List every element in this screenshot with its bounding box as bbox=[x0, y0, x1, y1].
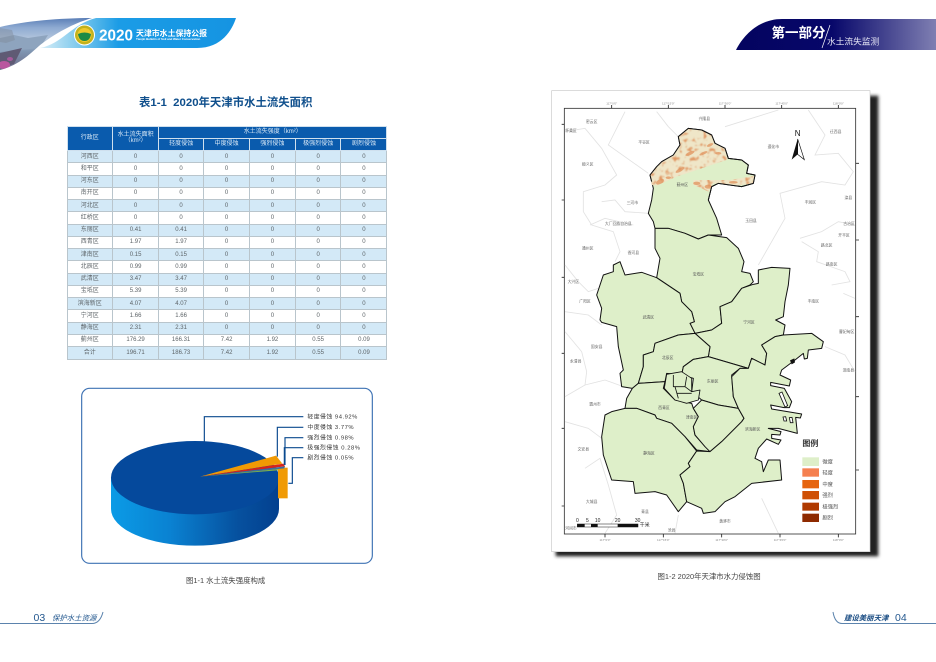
table: soil erosion area by district: 0 bbox=[225, 154, 228, 160]
table: soil erosion area by district: 0 bbox=[362, 264, 366, 270]
neighbouring place names: 古冶区 bbox=[843, 221, 855, 226]
table: soil erosion area by district: 0.99 bbox=[175, 264, 187, 270]
coordinate ticks bbox=[562, 105, 859, 537]
table: soil erosion area by district: 行政区 bbox=[81, 135, 99, 141]
table: soil erosion area by district: 196.71 bbox=[126, 350, 145, 356]
footer right: slogan and page number: 04 bbox=[895, 612, 907, 624]
table: soil erosion area by district: 蓟州区 bbox=[81, 337, 99, 343]
table: soil erosion area by district: 0.15 bbox=[130, 252, 141, 258]
region: Jinghai bbox=[602, 408, 697, 512]
Tianjin district names: 宝坻区 bbox=[693, 271, 704, 276]
scale bar: 20 bbox=[615, 518, 621, 524]
neighbouring place names: 丰南区 bbox=[808, 298, 819, 303]
neighbouring place names: 广阳区 bbox=[579, 298, 591, 303]
pie legend labels: 强烈侵蚀 0.98% bbox=[307, 433, 354, 441]
leader lines bbox=[204, 417, 303, 483]
table: soil erosion area by district: 0 bbox=[225, 325, 228, 331]
neighbouring place names: 大城县 bbox=[586, 499, 598, 504]
table: soil erosion area by district: 0.41 bbox=[175, 227, 187, 233]
wedge: extreme erosion bbox=[200, 466, 285, 477]
table: soil erosion area by district: 0 bbox=[134, 190, 137, 196]
table: soil erosion area by district: 0 bbox=[225, 215, 228, 221]
map drop shadow bbox=[556, 96, 878, 556]
table: soil erosion area by district: 2.31 bbox=[130, 325, 141, 331]
table: soil erosion area by district: 1.66 bbox=[130, 313, 141, 319]
table: soil erosion area by district: 0 bbox=[362, 178, 366, 184]
part subtitle: 水土流失监测 bbox=[827, 36, 879, 46]
Tianjin district names: 蓟州区 bbox=[677, 182, 688, 187]
table: soil erosion area by district: 0 bbox=[362, 301, 366, 307]
icon: north arrow: N bbox=[795, 129, 801, 138]
table: soil erosion area by district: 0.15 bbox=[175, 252, 187, 258]
table: soil erosion area by district: 0 bbox=[362, 276, 366, 282]
table: soil erosion area by district: 0 bbox=[179, 166, 183, 172]
region: Jizhou bbox=[648, 128, 755, 239]
coordinate labels: 117°45′0″ bbox=[775, 101, 788, 105]
table: soil erosion area by district: 0 bbox=[271, 178, 274, 184]
coordinate labels: 117°30′0″ bbox=[715, 538, 728, 542]
map legend: 极强烈 bbox=[822, 503, 839, 511]
table: soil erosion area by district: 1.92 bbox=[267, 350, 278, 356]
table: soil erosion area by district: 3.47 bbox=[175, 276, 187, 282]
neighbouring place names: 黄骅市 bbox=[719, 518, 731, 523]
neighbouring place names: 滦县 bbox=[845, 195, 852, 200]
table: soil erosion area by district: 0 bbox=[134, 178, 137, 184]
caption: figure 1-1: 图1-1 水土流失强度构成 bbox=[186, 576, 265, 585]
table: soil erosion area by district: 0 bbox=[179, 203, 183, 209]
map legend: 中度 bbox=[822, 480, 834, 488]
scale bar bbox=[576, 518, 650, 529]
neighbouring place names: 路北区 bbox=[821, 242, 833, 247]
Tianjin district names: 武清区 bbox=[643, 315, 654, 320]
exploded orange side bbox=[278, 468, 288, 498]
table: soil erosion area by district: 0 bbox=[362, 325, 366, 331]
table: soil erosion area by district: 和平区 bbox=[81, 166, 99, 172]
table: soil erosion area by district: 0 bbox=[316, 154, 320, 160]
footer left: page number and section: 03 bbox=[34, 612, 45, 624]
neighbouring place names: 玉田县 bbox=[745, 218, 757, 223]
map legend: 轻度 bbox=[822, 469, 834, 477]
table: soil erosion area by district: 西青区 bbox=[81, 239, 99, 245]
footer right: slogan and page number bbox=[832, 612, 936, 624]
coordinate labels: 117°45′0″ bbox=[774, 538, 786, 542]
table: soil erosion area by district: 0 bbox=[362, 313, 366, 319]
table: soil erosion area by district: 0 bbox=[225, 264, 228, 270]
table: soil erosion area by district: 0 bbox=[316, 313, 320, 319]
table: soil erosion area by district: 5.39 bbox=[175, 288, 187, 294]
table: soil erosion area by district: 0 bbox=[179, 154, 183, 160]
Tianjin district names: 静海区 bbox=[643, 451, 655, 456]
table: soil erosion area by district: 强烈侵蚀 bbox=[260, 141, 284, 147]
table: soil erosion area by district: 0 bbox=[271, 227, 274, 233]
header banner: part one bbox=[736, 19, 936, 50]
bulletin english name: Tianjin Bulletin of Soil and Water Conservation bbox=[136, 37, 200, 41]
table: soil erosion area by district: 水土流失强度（km²） bbox=[244, 129, 302, 135]
table: soil erosion area by district: 0 bbox=[316, 288, 320, 294]
table: soil erosion area by district: 宝坻区 bbox=[81, 288, 99, 294]
table: soil erosion area by district: 剧烈侵蚀 bbox=[352, 141, 376, 147]
region: Binhai bbox=[680, 333, 823, 513]
table: soil erosion area by district: 0 bbox=[316, 325, 320, 331]
header banner: bulletin logo strip bbox=[0, 18, 236, 70]
table: soil erosion area by district: 0 bbox=[271, 190, 274, 196]
neighbouring place names bbox=[565, 116, 855, 532]
table: soil erosion area by district: 轻度侵蚀 bbox=[169, 141, 193, 147]
table: soil erosion area by district: 0 bbox=[179, 215, 183, 221]
coordinate labels: 117°15′0″ bbox=[662, 101, 675, 105]
map sheet bbox=[552, 91, 870, 552]
table: soil erosion area by district: 0 bbox=[271, 166, 274, 172]
bulletin name: 天津市水土保持公报 bbox=[136, 28, 207, 38]
region: central urban districts bbox=[664, 372, 700, 403]
table: soil erosion area by district: 0 bbox=[271, 301, 274, 307]
pie side bbox=[111, 478, 279, 546]
photo swoosh bbox=[0, 18, 92, 70]
map legend bbox=[802, 438, 839, 522]
table: soil erosion area by district: 水土流失面积 bbox=[118, 132, 154, 138]
neighbouring place names: 通州区 bbox=[582, 246, 594, 251]
coordinate labels bbox=[600, 101, 844, 542]
table: soil erosion area by district: 宁河区 bbox=[81, 313, 99, 319]
table: soil erosion area by district: 1.66 bbox=[175, 313, 187, 319]
table: soil erosion area by district: 0 bbox=[271, 276, 274, 282]
region: Beichen bbox=[638, 333, 710, 383]
neighbouring place names: 迁西县 bbox=[830, 129, 842, 134]
region: Ninghe bbox=[695, 267, 790, 368]
Tianjin district names: 津南区 bbox=[686, 414, 698, 419]
2020: 2020 bbox=[99, 28, 133, 44]
table: soil erosion area by district: 0.55 bbox=[312, 337, 324, 343]
region: Xiqing bbox=[625, 382, 710, 452]
footer left: page number and section bbox=[0, 612, 104, 624]
table: soil erosion area by district: 0 bbox=[271, 239, 274, 245]
pie top: light erosion bbox=[111, 441, 279, 514]
table: soil erosion area by district: 0 bbox=[271, 313, 274, 319]
map legend: 强烈 bbox=[822, 491, 834, 499]
coordinate labels: 117°30′0″ bbox=[719, 101, 731, 105]
icon: north arrow bbox=[792, 129, 804, 160]
table: soil erosion area by district: 0 bbox=[316, 276, 320, 282]
scale bar: 10 bbox=[595, 518, 601, 524]
table: soil erosion area by district: 0.99 bbox=[130, 264, 141, 270]
table: soil erosion area by district: 0 bbox=[362, 215, 366, 221]
coordinate labels: 117°15′0″ bbox=[657, 538, 670, 542]
region: Dongli bbox=[682, 357, 748, 408]
table: soil erosion area by district: 166.31 bbox=[172, 337, 190, 343]
map legend: 图例 bbox=[802, 438, 818, 448]
table: soil erosion area by district: 0 bbox=[179, 178, 183, 184]
pie legend labels: 极强烈侵蚀 0.28% bbox=[307, 443, 360, 451]
table: soil erosion area by district: 5.39 bbox=[130, 288, 141, 294]
neighbouring place names: 怀柔区 bbox=[565, 128, 577, 133]
table: soil erosion area by district: 北辰区 bbox=[81, 264, 99, 270]
Tianjin district names: 宁河区 bbox=[743, 320, 755, 325]
table: soil erosion area by district: 4.07 bbox=[175, 301, 187, 307]
table: soil erosion area by district: 0 bbox=[225, 239, 228, 245]
table: soil erosion area by district: 176.29 bbox=[126, 337, 145, 343]
table: soil erosion area by district: 0 bbox=[362, 288, 366, 294]
neighbouring place names: 路南区 bbox=[826, 261, 838, 266]
scale bar: 千米 bbox=[640, 522, 650, 529]
table: soil erosion area by district: 0.09 bbox=[358, 337, 370, 343]
coordinate labels: 118°0′0″ bbox=[833, 538, 844, 542]
part title: 第一部分 bbox=[772, 24, 826, 40]
table: soil erosion area by district: 0 bbox=[225, 227, 228, 233]
table: soil erosion area by district: 1.97 bbox=[130, 239, 141, 245]
neighbouring place names: 永清县 bbox=[570, 358, 582, 363]
region polygons bbox=[597, 128, 823, 513]
table: soil erosion area by district: 0 bbox=[225, 276, 228, 282]
neighbouring place names: 曹妃甸区 bbox=[839, 329, 854, 334]
table: soil erosion area by district: 186.73 bbox=[172, 350, 190, 356]
table: soil erosion area by district: 0 bbox=[271, 288, 274, 294]
table: soil erosion area by district: 0 bbox=[362, 239, 366, 245]
table: soil erosion area by district: 0 bbox=[316, 190, 320, 196]
pie legend labels: 中度侵蚀 3.77% bbox=[307, 423, 354, 431]
caption: figure 1-2: 图1-2 2020年天津市水力侵蚀图 bbox=[658, 572, 761, 581]
scale bar: 0 bbox=[576, 518, 579, 524]
table: soil erosion area by district: 0 bbox=[225, 288, 228, 294]
table: soil erosion area by district: 0.09 bbox=[358, 350, 370, 356]
neighbouring place names: 遵化市 bbox=[768, 144, 779, 149]
table: soil erosion area by district: 2.31 bbox=[175, 325, 187, 331]
Tianjin district names: 西青区 bbox=[658, 405, 670, 410]
table: soil erosion area by district: （km²） bbox=[125, 138, 147, 144]
table: soil erosion area by district: 0 bbox=[316, 264, 320, 270]
erosion patches in north Jizhou bbox=[650, 129, 754, 192]
table: soil erosion area by district: 0 bbox=[316, 301, 320, 307]
neighbouring place names: 兴隆县 bbox=[699, 116, 710, 121]
table: soil erosion area by district: 津南区 bbox=[81, 252, 99, 258]
table: soil erosion area by district: 0 bbox=[362, 203, 366, 209]
scale bar: 5 bbox=[586, 518, 589, 524]
table: soil erosion area by district: 0 bbox=[134, 166, 137, 172]
panel: erosion map of Tianjin bbox=[551, 90, 881, 559]
table: soil erosion area by district: 0 bbox=[362, 252, 366, 258]
table: soil erosion area by district: 0 bbox=[362, 190, 366, 196]
Tianjin district names bbox=[643, 182, 760, 456]
wedge: severe erosion bbox=[200, 469, 278, 477]
neighbouring place names: 滦南县 bbox=[843, 367, 854, 372]
table: soil erosion area by district: 河东区 bbox=[81, 178, 99, 184]
map legend: 微度 bbox=[822, 457, 834, 465]
table: soil erosion area by district: 0 bbox=[134, 215, 137, 221]
pie legend labels bbox=[307, 413, 360, 462]
map frame bbox=[564, 108, 856, 534]
scale bar: 30 bbox=[635, 518, 641, 524]
neighbouring place names: 三河市 bbox=[627, 200, 638, 205]
table: soil erosion area by district: 0 bbox=[271, 325, 274, 331]
neighbouring place names: 固安县 bbox=[591, 344, 603, 349]
table: soil erosion area by district: 河北区 bbox=[81, 203, 99, 209]
table: soil erosion area by district: 0 bbox=[225, 301, 228, 307]
table: soil erosion area by district: 0 bbox=[316, 252, 320, 258]
Tianjin district names: 滨海新区 bbox=[745, 426, 760, 431]
table: soil erosion area by district: 0 bbox=[271, 264, 274, 270]
table: soil erosion area by district: 4.07 bbox=[130, 301, 141, 307]
table: soil erosion area by district: 河西区 bbox=[81, 154, 99, 160]
wedge: moderate erosion bbox=[200, 456, 282, 477]
region: Baodi bbox=[655, 228, 753, 333]
table: soil erosion area by district bbox=[67, 126, 387, 360]
harbour inlets bbox=[779, 392, 793, 423]
table: soil erosion area by district: 0 bbox=[271, 252, 274, 258]
Tianjin district names: 东丽区 bbox=[707, 378, 719, 383]
neighbouring place names: 大兴区 bbox=[568, 279, 579, 284]
table: soil erosion area by district: 0 bbox=[316, 239, 320, 245]
footer right: slogan and page number: 建设美丽天津 bbox=[844, 614, 890, 622]
neighbouring place names: 沧县 bbox=[668, 527, 676, 532]
blue ribbon bbox=[40, 18, 236, 48]
table: soil erosion area by district: 0.41 bbox=[130, 227, 141, 233]
neighbouring place names: 顺义区 bbox=[582, 162, 594, 167]
Tianjin district names: 北辰区 bbox=[662, 355, 674, 360]
footer left: page number and section: 保护水土资源 bbox=[52, 614, 98, 622]
table: soil erosion area by district: 3.47 bbox=[130, 276, 141, 282]
region: Jinnan bbox=[693, 400, 744, 452]
neighbouring place names: 开平区 bbox=[838, 233, 850, 237]
neighbouring place names: 密云区 bbox=[586, 119, 598, 124]
table: soil erosion area by district: 0 bbox=[225, 166, 228, 172]
coordinate labels: 117°0′0″ bbox=[606, 101, 617, 105]
table: soil erosion area by district: 滨海新区 bbox=[78, 301, 102, 307]
panel: 3D pie chart of erosion intensity bbox=[81, 388, 373, 564]
neighbouring boundaries bbox=[565, 110, 855, 533]
table: soil erosion area by district: 0 bbox=[362, 154, 366, 160]
table: soil erosion area by district: 0 bbox=[225, 252, 228, 258]
table: soil erosion area by district: 0.55 bbox=[312, 350, 324, 356]
table: soil erosion area by district: 0 bbox=[316, 215, 320, 221]
table: soil erosion area by district: 0 bbox=[271, 154, 274, 160]
table: soil erosion area by district: 0 bbox=[316, 227, 320, 233]
wedge: strong erosion bbox=[200, 464, 285, 477]
table: soil erosion area by district: 0 bbox=[134, 203, 137, 209]
table: soil erosion area by district: 0 bbox=[271, 215, 274, 221]
table: soil erosion area by district: 合计 bbox=[84, 350, 96, 356]
region: Wuqing bbox=[597, 262, 695, 388]
neighbouring place names: 文安县 bbox=[578, 446, 589, 451]
table: soil erosion area by district: 0 bbox=[362, 166, 366, 172]
coordinate labels: 118°0′0″ bbox=[833, 101, 844, 105]
coordinate labels: 117°0′0″ bbox=[600, 538, 610, 542]
table: soil erosion area by district: 0 bbox=[179, 190, 183, 196]
table: soil erosion area by district: 0 bbox=[316, 178, 320, 184]
logo bbox=[74, 24, 95, 46]
table title: 表1-1 2020年天津市水土流失面积 bbox=[139, 96, 312, 108]
neighbouring place names: 霸州市 bbox=[589, 401, 601, 406]
table: soil erosion area by district: 0 bbox=[316, 203, 320, 209]
pie legend labels: 剧烈侵蚀 0.05% bbox=[307, 454, 354, 462]
table: soil erosion area by district: 0 bbox=[225, 178, 228, 184]
table: soil erosion area by district: 武清区 bbox=[81, 276, 99, 282]
neighbouring place names: 大厂回族自治县 bbox=[605, 221, 632, 226]
table: soil erosion area by district: 极强烈侵蚀 bbox=[303, 141, 333, 147]
table: soil erosion area by district: 东丽区 bbox=[81, 227, 99, 233]
table: soil erosion area by district: 1.97 bbox=[175, 239, 187, 245]
map legend: 剧烈 bbox=[822, 513, 834, 521]
table: soil erosion area by district: 1.92 bbox=[267, 337, 278, 343]
table: soil erosion area by district: 0 bbox=[225, 190, 228, 196]
neighbouring place names: 平谷区 bbox=[638, 139, 650, 144]
neighbouring place names: 河间市 bbox=[565, 526, 577, 531]
table: soil erosion area by district: 7.42 bbox=[221, 337, 232, 343]
neighbouring place names: 青县 bbox=[641, 509, 649, 514]
table: soil erosion area by district: 中度侵蚀 bbox=[215, 141, 239, 147]
table: soil erosion area by district: 红桥区 bbox=[81, 215, 99, 221]
table: soil erosion area by district: 0 bbox=[271, 203, 274, 209]
table: soil erosion area by district: 南开区 bbox=[81, 190, 99, 196]
table: soil erosion area by district: 静海区 bbox=[81, 325, 99, 331]
pie legend labels: 轻度侵蚀 94.92% bbox=[307, 413, 358, 421]
table: soil erosion area by district: 0 bbox=[225, 313, 228, 319]
neighbouring place names: 香河县 bbox=[628, 250, 639, 255]
table: soil erosion area by district: 0 bbox=[134, 154, 137, 160]
table: soil erosion area by district: 0 bbox=[362, 227, 366, 233]
neighbouring place names: 丰润区 bbox=[805, 200, 816, 205]
table: soil erosion area by district: 0 bbox=[225, 203, 228, 209]
table: soil erosion area by district: 0 bbox=[316, 166, 320, 172]
table: soil erosion area by district: 7.42 bbox=[221, 350, 232, 356]
